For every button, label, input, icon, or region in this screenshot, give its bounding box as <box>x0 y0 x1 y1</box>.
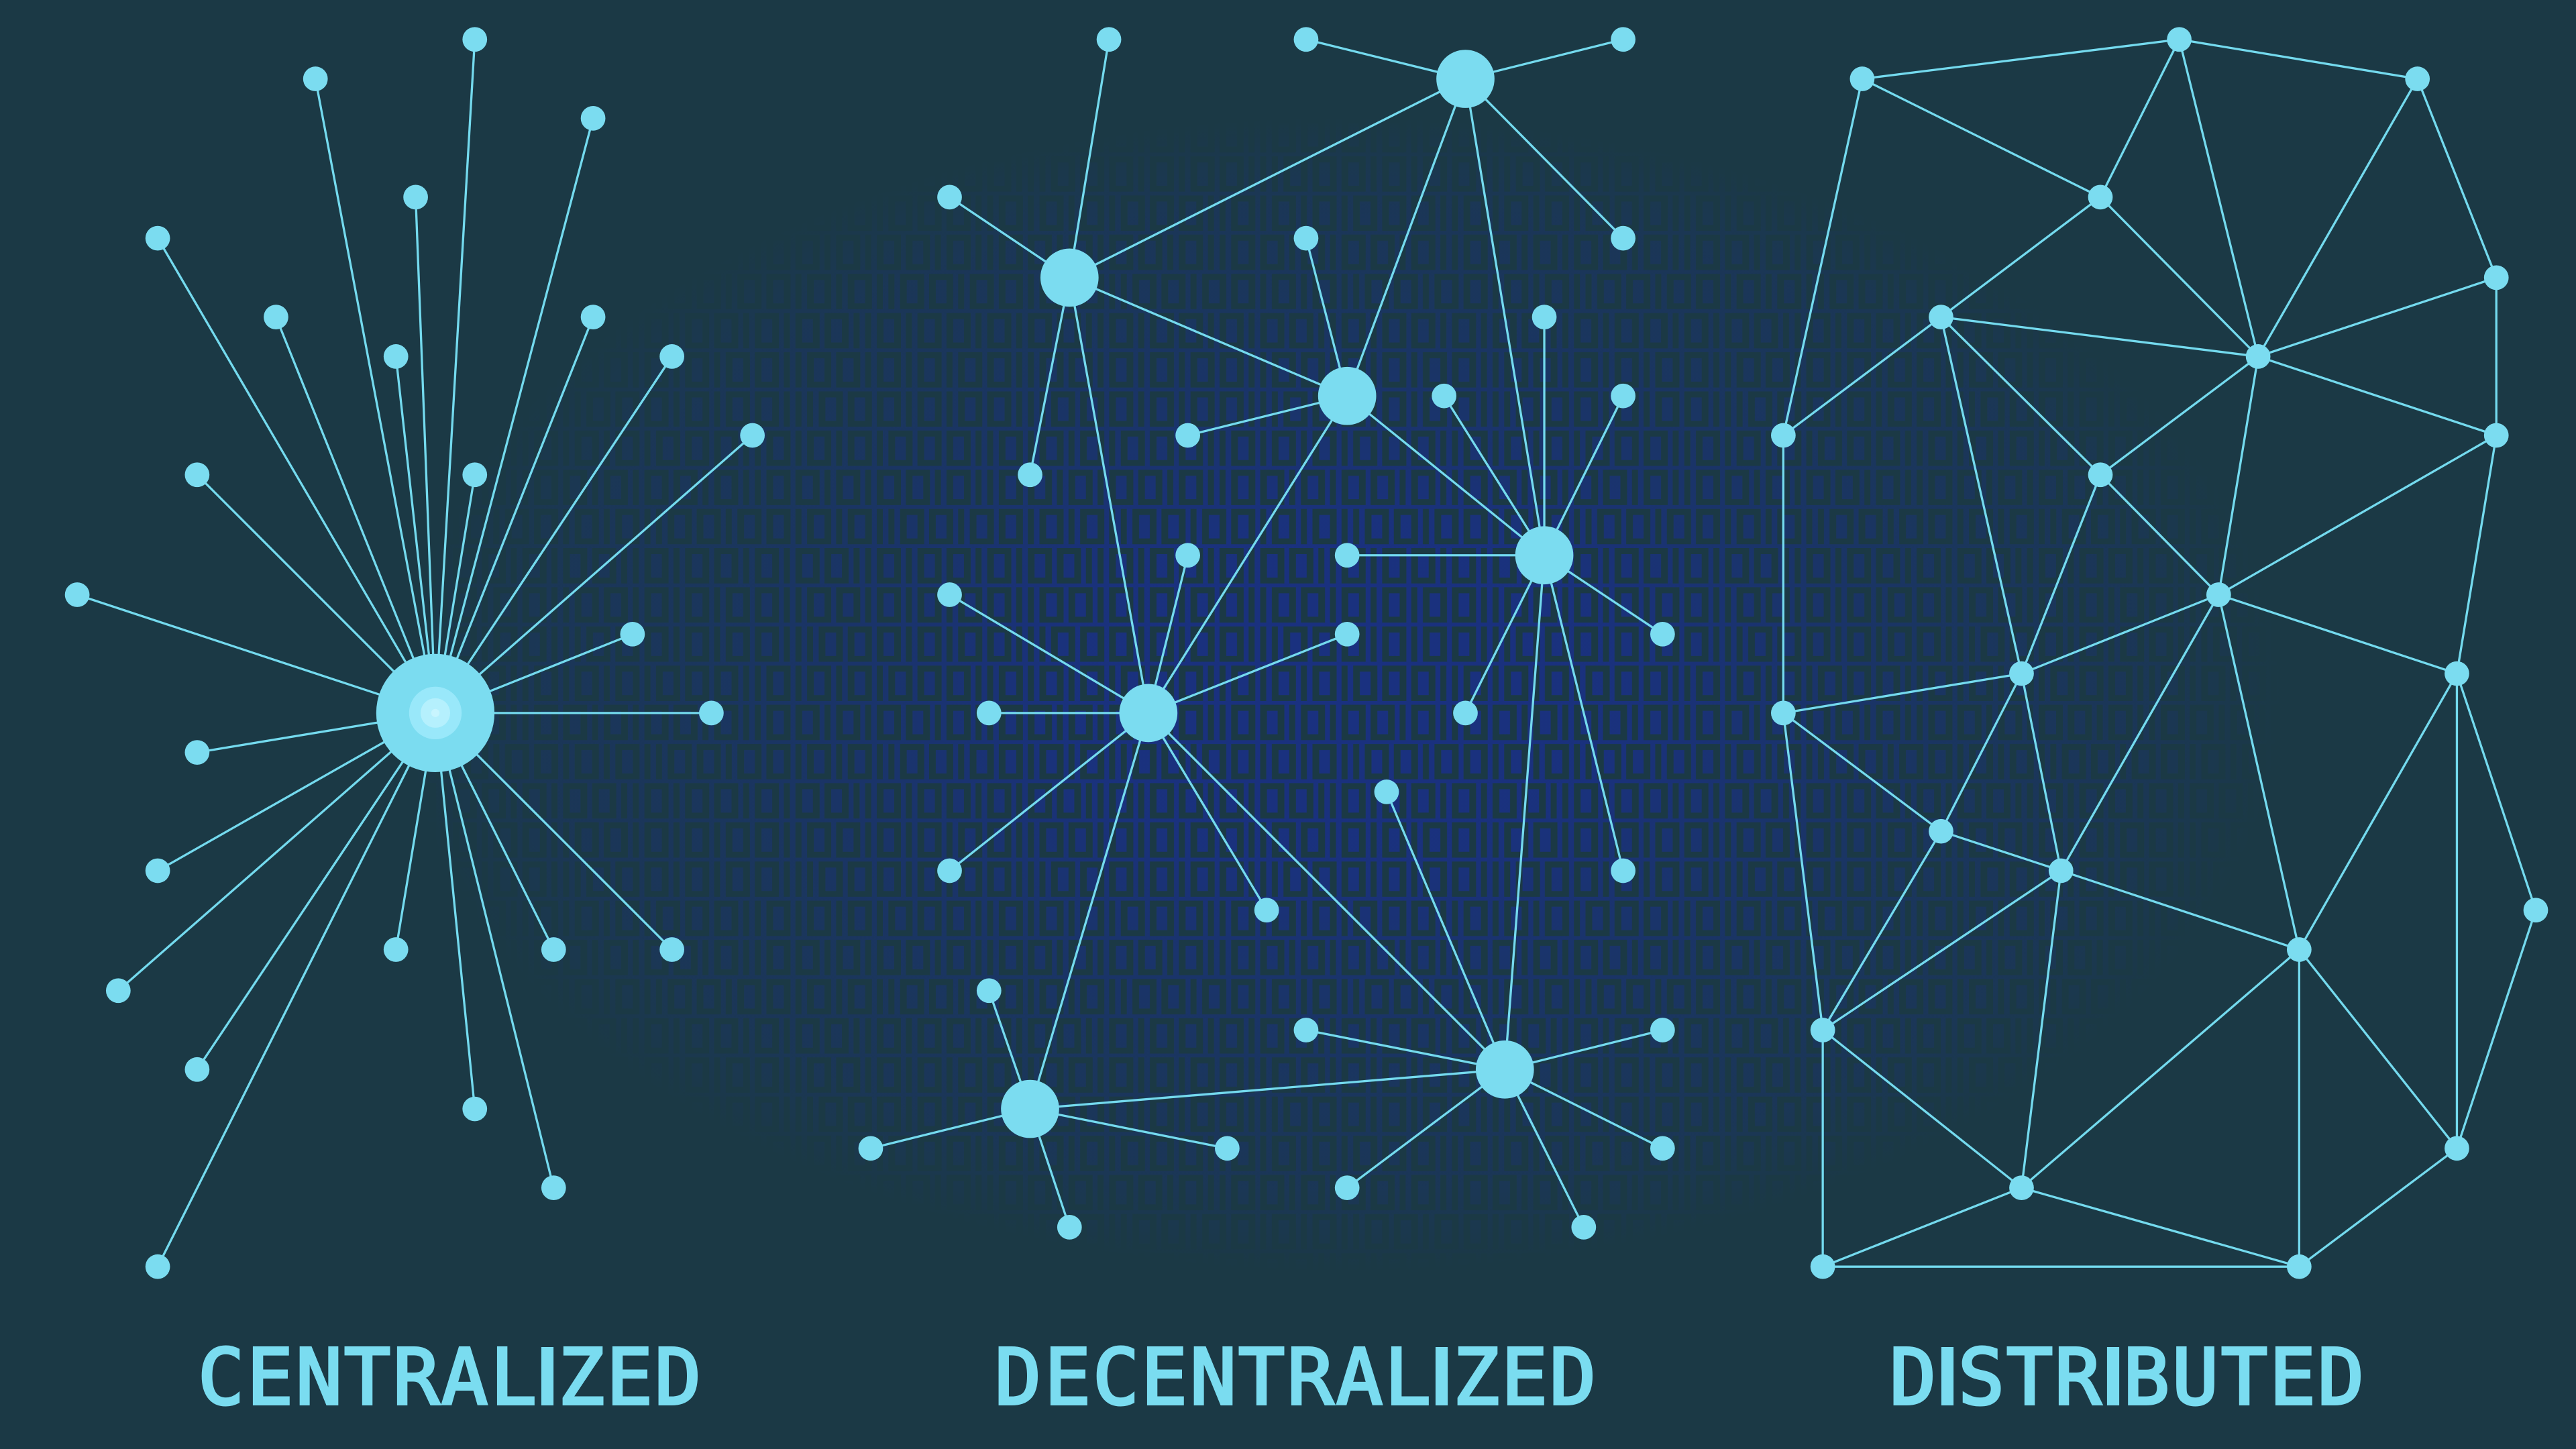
heading: decentralized: C <box>1093 1333 1139 1423</box>
heading: distributed: R <box>2055 1333 2102 1423</box>
heading: decentralized: E <box>1501 1333 1548 1423</box>
panel: distributed network <box>1771 27 2548 1279</box>
heading: centralized: E <box>606 1333 653 1423</box>
heading: centralized: E <box>247 1333 293 1423</box>
panel: centralized network <box>65 27 765 1279</box>
heading: distributed: U <box>2172 1333 2218 1423</box>
heading: distributed: S <box>1958 1333 2004 1423</box>
heading: distributed: B <box>2123 1333 2169 1423</box>
panel: decentralized network <box>859 27 1675 1240</box>
heading: distributed: D <box>2318 1333 2364 1423</box>
decentralized hub nodes <box>1001 50 1573 1138</box>
centralized leaf nodes <box>65 27 765 1279</box>
heading: centralized: N <box>296 1333 342 1423</box>
background fade over binary pattern <box>335 101 2348 1308</box>
heading: centralized: D <box>655 1333 701 1423</box>
heading: decentralized: L <box>1385 1333 1431 1423</box>
heading: distributed: D <box>1890 1333 1936 1423</box>
heading: decentralized: Z <box>1453 1333 1499 1423</box>
distributed mesh lines <box>1783 40 2536 1267</box>
centralized connection lines <box>77 40 753 1267</box>
heading: distributed: T <box>2221 1333 2267 1423</box>
heading: decentralized: R <box>1287 1333 1334 1423</box>
heading: centralized: I <box>535 1329 559 1424</box>
decentralized spoke lines <box>871 40 1662 1227</box>
heading: centralized: Z <box>558 1333 604 1423</box>
decentralized hub links <box>1030 79 1544 1109</box>
heading: centralized: A <box>441 1333 488 1423</box>
heading: distributed: E <box>2269 1333 2316 1423</box>
heading: decentralized: N <box>1190 1333 1236 1423</box>
decentralized leaf nodes <box>859 27 1675 1240</box>
heading: decentralized: D <box>1550 1333 1596 1423</box>
heading: decentralized: D <box>995 1333 1041 1423</box>
heading: centralized: L <box>490 1333 537 1423</box>
heading: decentralized: T <box>1238 1333 1285 1423</box>
heading: decentralized: I <box>1430 1329 1454 1424</box>
heading: centralized: R <box>393 1333 440 1423</box>
distributed nodes <box>1771 27 2548 1279</box>
binary code background pattern <box>335 101 2348 1308</box>
heading: distributed: I <box>2101 1329 2125 1424</box>
heading: centralized: T <box>344 1333 390 1423</box>
heading: distributed: T <box>2006 1333 2053 1423</box>
heading: decentralized: E <box>1044 1333 1091 1423</box>
heading: decentralized: A <box>1336 1333 1383 1423</box>
heading: distributed: I <box>1935 1329 1960 1424</box>
heading: centralized: C <box>198 1333 244 1423</box>
centralized hub node <box>376 654 494 772</box>
heading: decentralized: E <box>1141 1333 1187 1423</box>
